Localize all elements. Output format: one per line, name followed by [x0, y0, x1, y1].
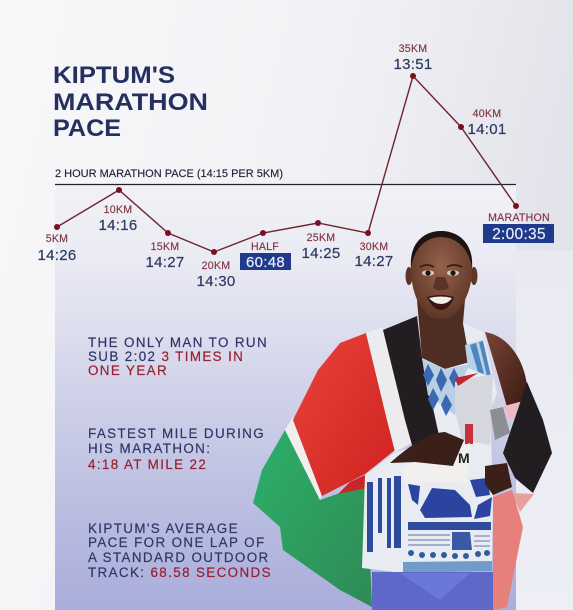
- background panel: [55, 185, 516, 610]
- stat: average lap pace: PACE FOR ONE LAP OF: [88, 535, 266, 550]
- flag: red section: [293, 333, 395, 496]
- 40km label: 14:01: [467, 121, 507, 138]
- shorts shade: [400, 573, 470, 600]
- 15km label: [145, 241, 185, 271]
- right edge band: [516, 250, 573, 610]
- grey flag fold: [490, 407, 510, 440]
- left hand: [390, 432, 464, 466]
- neck and chest: [417, 300, 470, 369]
- half label: HALF: [251, 241, 279, 253]
- 5km label: 5KM: [46, 233, 68, 245]
- 5km label: [37, 233, 77, 264]
- 25km label: 14:25: [301, 245, 341, 262]
- shorts: [372, 572, 493, 610]
- singlet print dots: [408, 550, 490, 559]
- right arm: [485, 332, 527, 407]
- stat: average lap pace: 68.58 SECONDS: [150, 565, 272, 580]
- race bib: M: [458, 450, 470, 466]
- reference line: [55, 184, 516, 186]
- half label: [240, 241, 291, 271]
- stat: average lap pace: KIPTUM'S AVERAGE: [88, 521, 239, 536]
- stat: fastest mile: 4:18 AT MILE 22: [88, 457, 207, 472]
- runner with Kenyan flag: [253, 231, 552, 610]
- 20km label: 20KM: [202, 260, 230, 272]
- flag: black right section: [503, 382, 552, 493]
- smile: [427, 295, 454, 310]
- eyes: [422, 270, 459, 276]
- singlet print band: [408, 522, 491, 530]
- stat: average lap pace: A STANDARD OUTDOOR: [88, 550, 270, 565]
- singlet print letter shape: [452, 532, 472, 550]
- singlet white speckled panel: [455, 374, 493, 445]
- reference line label: 2 HOUR MARATHON PACE (14:15 PER 5KM): [55, 168, 283, 180]
- pink flag drape: [493, 490, 523, 610]
- 15km label: 15KM: [151, 241, 179, 253]
- pink wristband: [504, 401, 524, 420]
- singlet blue leaf print: [408, 478, 492, 519]
- nose: [433, 277, 449, 290]
- singlet diamond pattern: [423, 364, 459, 416]
- flag: white stripe: [366, 327, 412, 452]
- flag: green section: [253, 430, 372, 607]
- flag: lower red strip: [338, 474, 367, 494]
- pace line chart: [54, 73, 519, 255]
- 30km label: 14:27: [354, 253, 394, 270]
- 10km label: 14:16: [98, 217, 138, 234]
- 5km label: 14:26: [37, 247, 77, 264]
- stat: average lap pace: TRACK:: [88, 565, 150, 580]
- marathon label: MARATHON: [488, 212, 550, 224]
- flag: white and red right slip: [512, 493, 534, 512]
- 35km label: 35KM: [399, 43, 427, 55]
- 30km label: [354, 241, 394, 270]
- 20km label: [196, 260, 236, 290]
- singlet striped strap: [465, 340, 492, 378]
- 20km label: 14:30: [196, 273, 236, 290]
- flag: white border: [285, 417, 325, 500]
- singlet base: [362, 323, 497, 573]
- title: KIPTUM'S: [53, 62, 175, 89]
- stat: sub 2:02: THE ONLY MAN TO RUN: [88, 335, 268, 350]
- ears: [406, 267, 478, 285]
- marathon label: [483, 212, 554, 243]
- 35km label: [393, 43, 433, 73]
- stat: fastest mile: HIS MARATHON:: [88, 441, 211, 456]
- eyebrows: [420, 265, 462, 267]
- red bib corner: [465, 424, 473, 444]
- stat: sub 2:02: 3 TIMES IN: [161, 349, 244, 364]
- singlet upper blue print: [422, 358, 470, 415]
- 10km label: 10KM: [104, 204, 132, 216]
- half label: 60:48: [246, 254, 285, 271]
- stat: sub 2:02: SUB 2:02: [88, 349, 161, 364]
- hair: [411, 231, 472, 268]
- title: [53, 62, 208, 142]
- 15km label: 14:27: [145, 254, 185, 271]
- 25km label: [301, 232, 341, 262]
- head: [411, 231, 472, 319]
- title: PACE: [53, 115, 121, 142]
- 25km label: 25KM: [307, 232, 335, 244]
- 10km label: [98, 204, 138, 234]
- 40km label: [467, 108, 507, 138]
- nike swoosh: [455, 373, 478, 386]
- singlet hem band: [403, 561, 492, 573]
- marathon label: 2:00:35: [492, 226, 546, 243]
- race bib: [403, 443, 470, 483]
- flag: black section: [383, 316, 465, 445]
- stat: sub 2:02: ONE YEAR: [88, 363, 168, 378]
- 40km label: 40KM: [473, 108, 501, 120]
- singlet vertical stripes: [367, 476, 401, 552]
- 30km label: 30KM: [360, 241, 388, 253]
- 35km label: 13:51: [393, 56, 433, 73]
- stat: fastest mile: FASTEST MILE DURING: [88, 426, 265, 441]
- singlet print lines: [408, 535, 490, 546]
- right hand: [485, 463, 512, 495]
- title: MARATHON: [53, 89, 208, 116]
